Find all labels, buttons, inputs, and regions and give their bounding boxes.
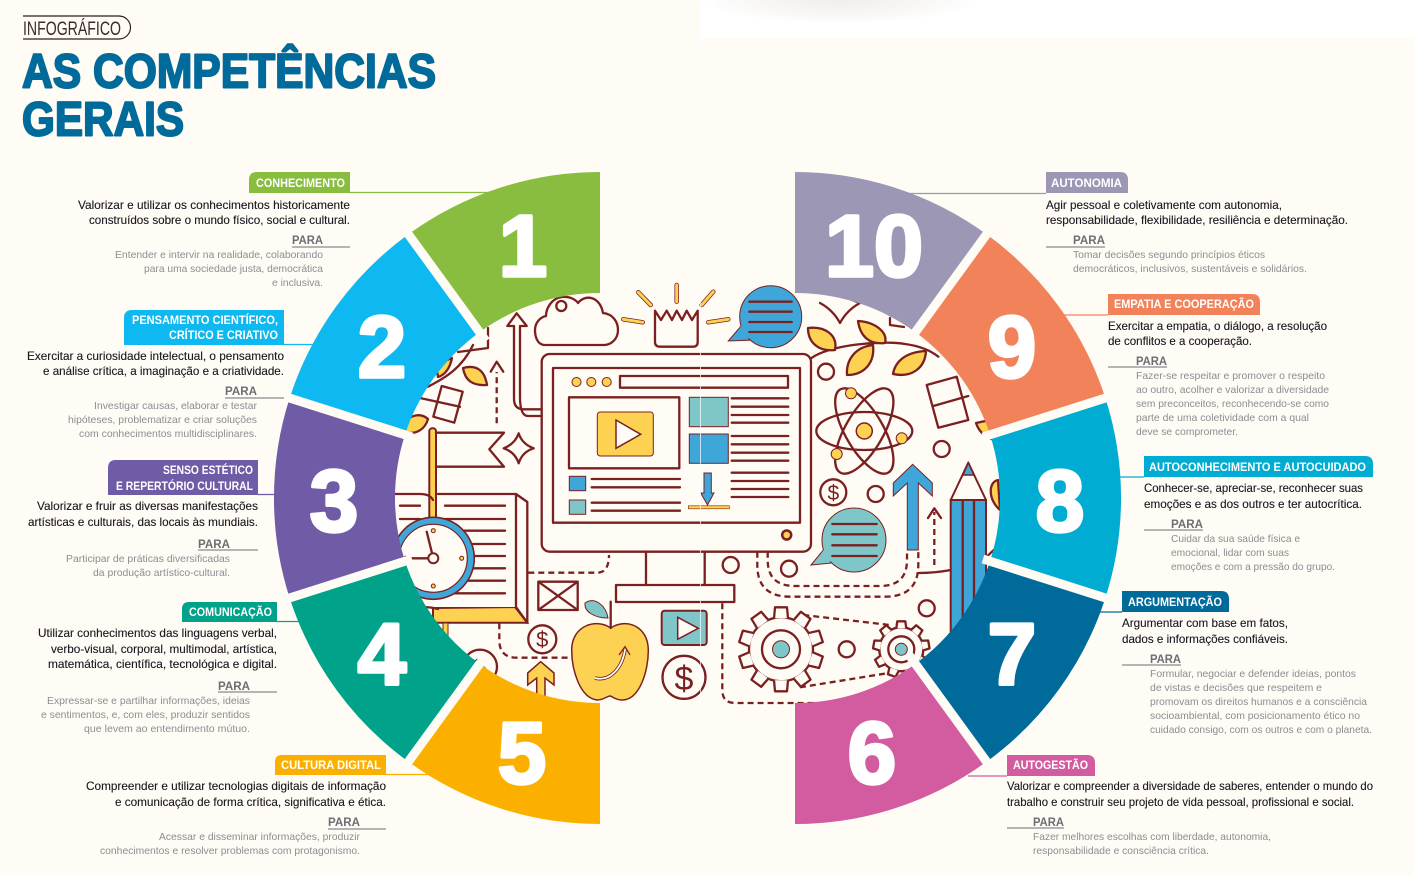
description: Conhecer-se, apreciar-se, reconhecer suas [1144, 481, 1363, 495]
para: Fazer-se respeitar e promover o respeito [1136, 370, 1325, 382]
tag: PENSAMENTO CIENTÍFICO, [132, 312, 278, 327]
tag [1062, 294, 1260, 315]
description [1046, 198, 1348, 227]
para [66, 537, 258, 579]
icon: diamond star [504, 433, 534, 463]
para: cuidado consigo, com os outros e com o planeta. [1150, 724, 1372, 736]
icon: partial leaves at right edge [976, 420, 1000, 557]
para: PARA [1150, 652, 1181, 666]
description: artísticas e culturais, das locais às mundiais. [28, 515, 258, 529]
para: PARA [292, 233, 323, 247]
ring: right half [795, 172, 1121, 824]
para: de vistas e decisões que respeitem e [1150, 682, 1322, 694]
tag: AUTOGESTÃO [1013, 757, 1088, 772]
panel: 4 comunicação [38, 602, 322, 735]
segment 9 empatia [916, 234, 1105, 435]
central illustration [392, 285, 1000, 703]
segment 2 pensamento científico [290, 234, 480, 435]
panel: 8 autoconhecimento e autocuidado [1116, 456, 1373, 573]
title: GERAIS [22, 94, 184, 146]
para: com conhecimentos multidisciplinares. [79, 428, 257, 440]
description: Agir pessoal e coletivamente com autonomia, [1046, 198, 1282, 212]
icon: clock [392, 517, 474, 599]
para: Participar de práticas diversificadas [66, 553, 230, 565]
tag [1096, 591, 1229, 612]
description [78, 198, 350, 227]
description [27, 349, 284, 378]
description: responsabilidade, flexibilidade, resiliência e determinação. [1046, 213, 1348, 227]
tag [1116, 456, 1373, 477]
icon: left vine and window [405, 328, 488, 433]
para: conhecimentos e resolver problemas com protagonismo. [100, 845, 360, 857]
tag: SENSO ESTÉTICO [163, 462, 253, 477]
segment 10 autonomia [795, 172, 987, 332]
description [38, 626, 277, 671]
icon: leafy branch [808, 290, 938, 375]
para: PARA [1073, 233, 1105, 247]
para: PARA [225, 384, 257, 398]
para: Entender e intervir na realidade, colaborando [115, 249, 323, 261]
faint print seam [700, 38, 702, 875]
icon: apple [572, 601, 648, 700]
description [86, 779, 386, 809]
para: socioambiental, com posicionamento ético no [1150, 710, 1360, 722]
para: PARA [218, 679, 250, 693]
icon: small video tile [662, 611, 707, 645]
description [1007, 779, 1373, 809]
description: verbo-visual, corporal, multimodal, artística, [51, 642, 277, 656]
icon: monitor with video player [542, 354, 811, 602]
description: Exercitar a empatia, o diálogo, a resolução [1108, 319, 1327, 333]
tag [275, 755, 445, 775]
segment 6 autogestão: 6 [848, 705, 896, 802]
description: Argumentar com base em fatos, [1122, 616, 1288, 630]
kicker: infográfico pill: INFOGRÁFICO [23, 19, 121, 40]
para: emoções e com a pressão do grupo. [1171, 561, 1335, 573]
segment 3 senso estético [274, 397, 405, 599]
icon: cloud [535, 297, 618, 345]
para [100, 815, 386, 857]
panel: 1 conhecimento [78, 172, 495, 289]
para [1046, 233, 1307, 275]
tag [968, 755, 1095, 776]
description [28, 499, 258, 529]
para: para uma sociedade justa, democrática [144, 263, 323, 275]
segment 7 argumentação [916, 561, 1105, 762]
tag [249, 172, 495, 193]
description: trabalho e construir seu projeto de vida pessoal, profissional e social. [1007, 795, 1354, 809]
panel: 6 autogestão [968, 755, 1373, 857]
description [1144, 481, 1363, 511]
para: Tomar decisões segundo princípios éticos [1073, 249, 1265, 261]
para: PARA [1171, 517, 1203, 531]
para [1144, 517, 1335, 573]
tag: CRÍTICO E CRIATIVO [169, 327, 278, 342]
para: promovam os direitos humanos e a consciência [1150, 696, 1367, 708]
segment 7 argumentação: 7 [988, 606, 1036, 703]
icon: flag [429, 428, 504, 528]
para: e inclusiva. [272, 277, 323, 289]
panel: 3 senso estético [28, 460, 300, 579]
segment 5 cultura digital: 5 [498, 705, 546, 802]
tag: AUTONOMIA [1051, 176, 1122, 190]
tag [182, 602, 322, 622]
para [1122, 652, 1372, 736]
description: Valorizar e utilizar os conhecimentos historicamente [78, 198, 350, 212]
para [1108, 354, 1329, 438]
tag: CONHECIMENTO [256, 176, 345, 190]
icon: double arrow up from monitor [507, 313, 542, 416]
description: Compreender e utilizar tecnologias digitais de informação [86, 779, 386, 793]
segment 8 autoconhecimento [990, 397, 1121, 599]
segment 1 conhecimento: 1 [499, 198, 547, 295]
para: parte de uma coletividade com a qual [1136, 412, 1309, 424]
para: Investigar causas, elaborar e testar [94, 400, 257, 412]
dashed connector bottom [722, 603, 817, 703]
description: construídos sobre o mundo físico, social e cultural. [89, 213, 350, 227]
para: Cuidar da sua saúde física e [1171, 533, 1300, 545]
para: responsabilidade e consciência crítica. [1033, 845, 1209, 857]
icon: envelope [538, 582, 578, 610]
description: Exercitar a curiosidade intelectual, o pensamento [27, 349, 284, 363]
description: e análise crítica, a imaginação e a criatividade. [43, 364, 284, 378]
panel: 10 autonomia [905, 172, 1348, 275]
icon: dollar coin right: $ [827, 482, 839, 505]
segment 5 cultura digital [408, 664, 600, 824]
icon: blue speech bubble [728, 286, 802, 348]
para [1007, 815, 1271, 857]
title: AS COMPETÊNCIAS [22, 44, 436, 98]
icon: blue up arrow with dashed tail [757, 464, 951, 597]
segment 4 comunicação: 4 [358, 606, 406, 703]
para: Fazer melhores escolhas com liberdade, autonomia, [1033, 831, 1271, 843]
icon: yellow up arrow [528, 662, 554, 697]
icons: small ring circles [723, 364, 950, 657]
panel: 5 cultura digital [86, 755, 445, 857]
description: matemática, científica, tecnológica e digital. [48, 657, 277, 671]
icon: partial dollar coin [463, 650, 497, 684]
segment 6 autogestão [795, 664, 987, 824]
icon: dollar coin right [820, 479, 846, 505]
gaps right [909, 226, 1115, 770]
icon: window sketch right [927, 377, 968, 428]
description: e comunicação de forma crítica, significativa e ética. [115, 795, 386, 809]
para: PARA [1033, 815, 1064, 829]
tag: CULTURA DIGITAL [281, 758, 381, 772]
description: Valorizar e fruir as diversas manifestações [37, 499, 258, 513]
segment 10 autonomia: 10 [825, 198, 923, 295]
description [1108, 319, 1327, 348]
para: PARA [198, 537, 230, 551]
description: de conflitos e a cooperação. [1108, 334, 1252, 348]
panel: 7 argumentação [1096, 591, 1372, 736]
panel: 2 pensamento científico [27, 310, 322, 440]
header: kicker and title [22, 16, 436, 146]
segment 1 conhecimento [408, 172, 600, 332]
para: da produção artístico-cultural. [93, 567, 230, 579]
para: que levem ao entendimento mútuo. [84, 723, 250, 735]
tag [108, 460, 300, 495]
icon: gears [739, 607, 930, 691]
tag: E REPERTÓRIO CULTURAL [116, 478, 253, 493]
icon: teal speech bubble [811, 508, 886, 572]
dashed connectors left [491, 362, 609, 658]
para: PARA [1136, 354, 1167, 368]
icon: open book [395, 494, 527, 653]
panel: 9 empatia e cooperação [1062, 294, 1329, 438]
title [22, 44, 436, 146]
para: deve se comprometer. [1136, 426, 1238, 438]
description: Utilizar conhecimentos das linguagens verbal, [38, 626, 277, 640]
icon: pencil [951, 463, 986, 640]
ring: left half [274, 172, 600, 824]
tag: COMUNICAÇÃO [189, 604, 272, 619]
icon: large dollar coin [662, 656, 706, 699]
tag [124, 310, 322, 345]
segment 4 comunicação [290, 561, 480, 762]
segment 8 autoconhecimento: 8 [1036, 453, 1084, 550]
para: hipóteses, problematizar e criar soluções [68, 414, 257, 426]
icon: small dollar coin [528, 625, 556, 653]
tag: EMPATIA E COOPERAÇÃO [1114, 296, 1254, 311]
description: emoções e as dos outros e ter autocrítica. [1144, 497, 1362, 511]
icon: large dollar coin: $ [675, 660, 694, 698]
icon: small dollar coin: $ [536, 627, 548, 652]
para: sem preconceitos, reconhecendo-se como [1136, 398, 1329, 410]
para: emocional, lidar com suas [1171, 547, 1289, 559]
para: Acessar e disseminar informações, produzir [159, 831, 360, 843]
tag: AUTOCONHECIMENTO E AUTOCUIDADO [1149, 460, 1366, 474]
icon: partial dollar coin: $ [473, 654, 487, 681]
para: e sentimentos, e, com eles, produzir sentidos [41, 709, 250, 721]
tag: ARGUMENTAÇÃO [1128, 594, 1222, 609]
icon: atom [816, 380, 912, 482]
para [68, 384, 284, 440]
para: democráticos, inclusivos, sustentáveis e solidários. [1073, 263, 1307, 275]
para [41, 679, 277, 735]
description: dados e informações confiáveis. [1122, 632, 1288, 646]
para: ao outro, acolher e valorizar a diversidade [1136, 384, 1329, 396]
tag [905, 172, 1128, 194]
description [1122, 616, 1288, 646]
segment 2 pensamento científico: 2 [358, 299, 406, 396]
para: Formular, negociar e defender ideias, pontos [1150, 668, 1356, 680]
gaps left [280, 226, 486, 770]
icon: crown with rays [623, 285, 728, 347]
para: PARA [328, 815, 360, 829]
segment 9 empatia: 9 [988, 299, 1036, 396]
para [115, 233, 350, 289]
description: Valorizar e compreender a diversidade de saberes, entender o mundo do [1007, 779, 1373, 793]
segment 3 senso estético: 3 [310, 453, 358, 550]
para: Expressar-se e partilhar informações, ideias [47, 695, 250, 707]
